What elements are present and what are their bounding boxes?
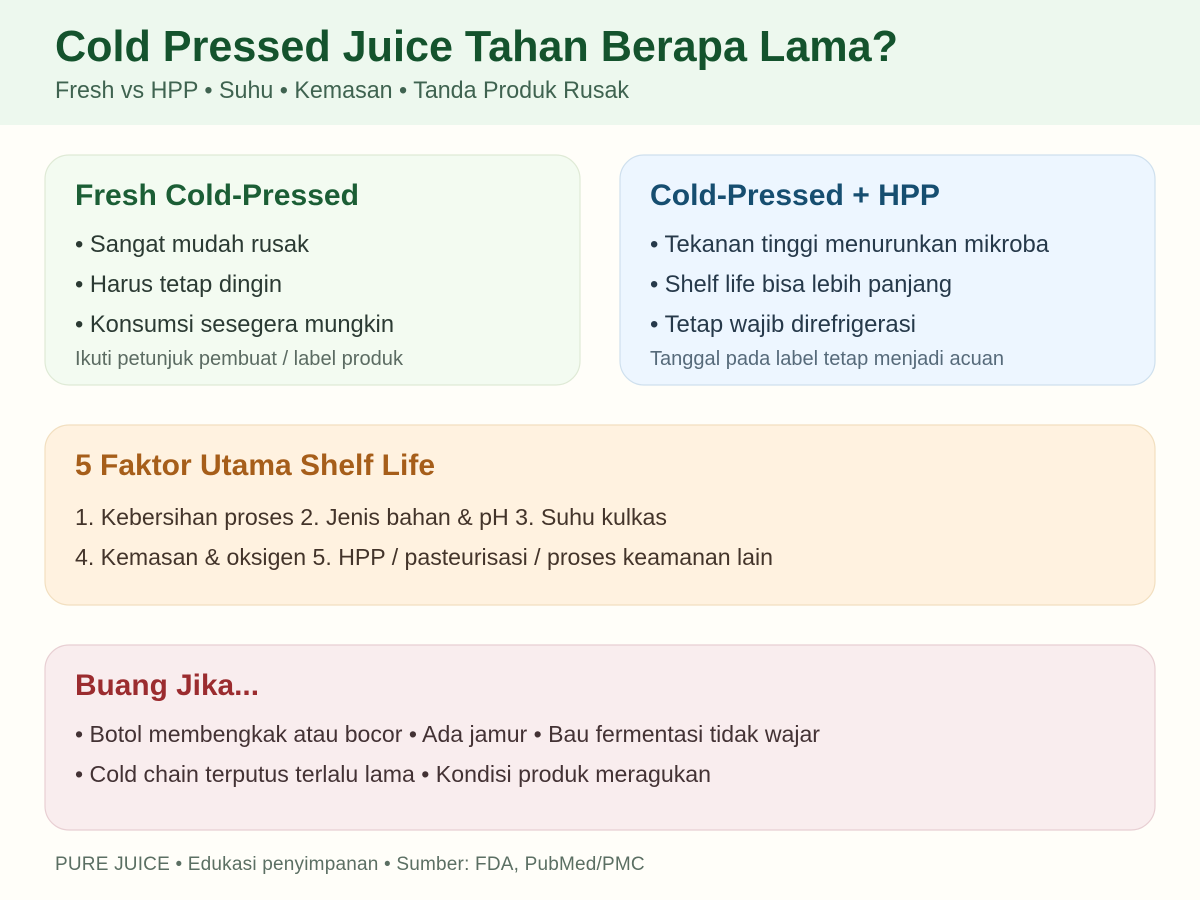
- bullet list: fresh: • Sangat mudah rusak: [75, 231, 310, 258]
- panel heading: HPP: Cold-Pressed + HPP: [650, 179, 940, 212]
- factor list: 1. Kebersihan proses 2. Jenis bahan & pH 3. Suhu kulkas: [75, 504, 667, 530]
- bullet list: HPP: • Tetap wajib direfrigerasi: [650, 311, 916, 338]
- bullet list: HPP: [650, 231, 1050, 338]
- footer: PURE JUICE • Edukasi penyimpanan • Sumber: FDA, PubMed/PMC: [55, 854, 645, 875]
- subtitle: Fresh vs HPP • Suhu • Kemasan • Tanda Produk Rusak: [55, 77, 630, 104]
- discard list: • Cold chain terputus terlalu lama • Kondisi produk meragukan: [75, 761, 711, 787]
- panel heading: fresh: Fresh Cold-Pressed: [75, 179, 359, 212]
- factor list: 4. Kemasan & oksigen 5. HPP / pasteurisasi / proses keamanan lain: [75, 544, 773, 570]
- header band: [0, 0, 1200, 125]
- panel: 5 faktor utama: [45, 425, 1155, 605]
- note: fresh: Ikuti petunjuk pembuat / label produk: [75, 348, 404, 370]
- discard list: • Botol membengkak atau bocor • Ada jamur • Bau fermentasi tidak wajar: [75, 721, 820, 747]
- panel heading: buang: Buang Jika...: [75, 669, 259, 702]
- panel: cold-pressed + HPP: [620, 155, 1155, 385]
- panel: buang jika: [45, 645, 1155, 830]
- bullet list: fresh: [75, 231, 394, 338]
- note: HPP: Tanggal pada label tetap menjadi acuan: [650, 348, 1004, 370]
- panel: fresh cold-pressed: [45, 155, 580, 385]
- panel heading: faktor: 5 Faktor Utama Shelf Life: [75, 449, 435, 482]
- bullet list: HPP: • Tekanan tinggi menurunkan mikroba: [650, 231, 1050, 258]
- factor list: [75, 504, 773, 570]
- bullet list: HPP: • Shelf life bisa lebih panjang: [650, 271, 952, 298]
- discard list: [75, 721, 820, 787]
- bullet list: fresh: • Konsumsi sesegera mungkin: [75, 311, 394, 338]
- bullet list: fresh: • Harus tetap dingin: [75, 271, 282, 298]
- title: Cold Pressed Juice Tahan Berapa Lama?: [55, 22, 898, 71]
